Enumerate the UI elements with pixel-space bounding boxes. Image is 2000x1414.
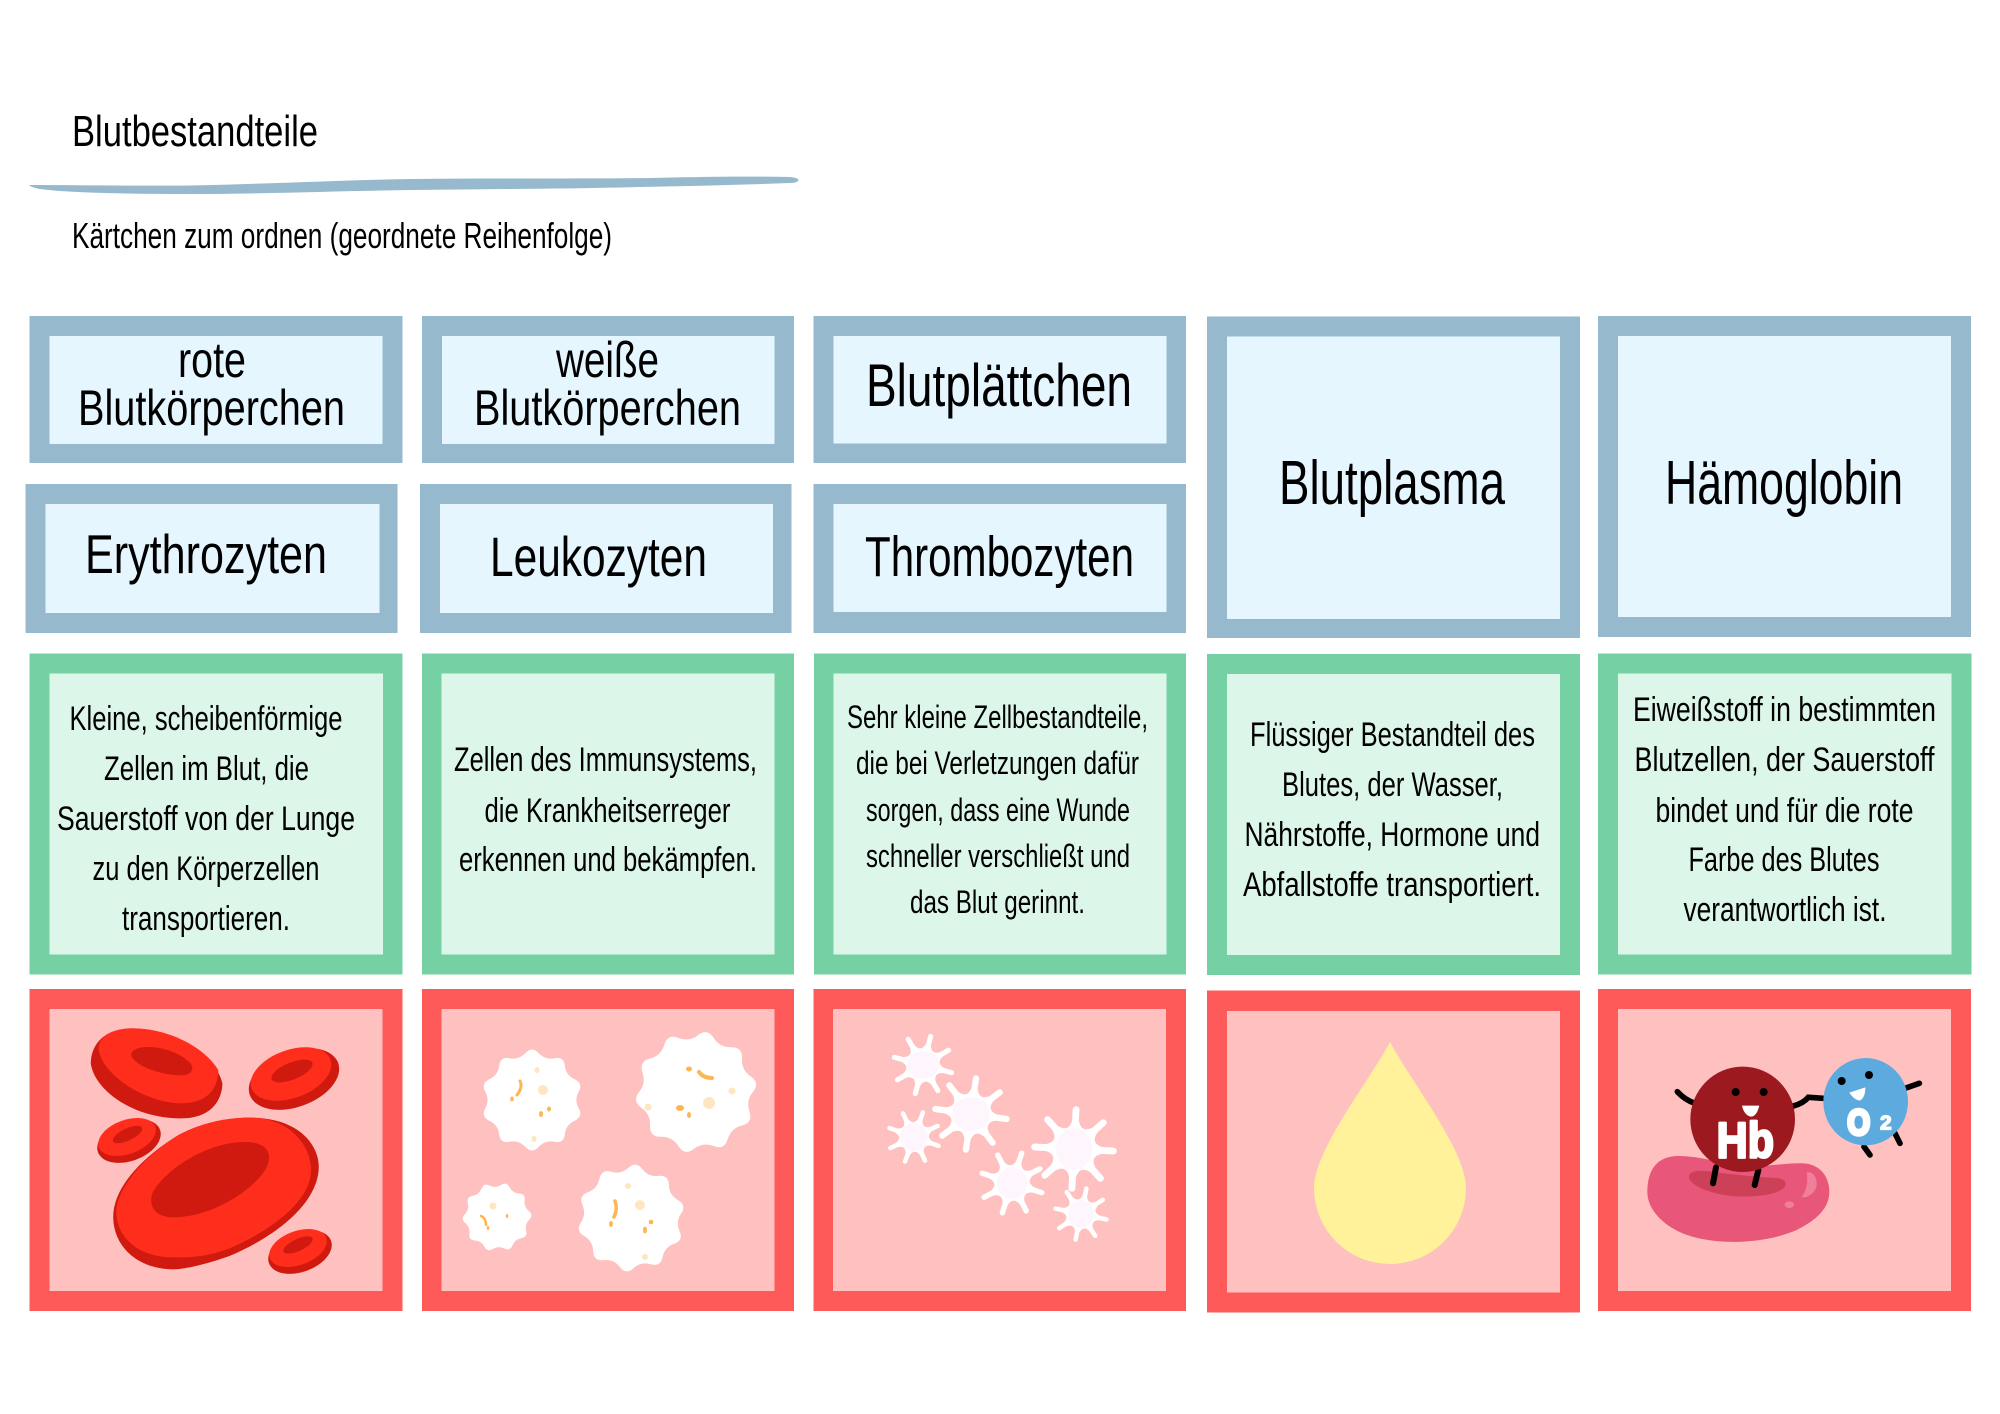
- title underline brush stroke: [29, 177, 798, 194]
- definition card: Thrombozyten: das Blut gerinnt.: [910, 884, 1085, 920]
- definition card: Blutplasma: Blutes, der Wasser,: [1282, 766, 1503, 804]
- icon: platelet 2: [930, 1073, 1012, 1155]
- definition card: Thrombozyten: Sehr kleine Zellbestandteile,: [847, 699, 1148, 735]
- definition card: Erythrozyten: Kleine, scheibenförmige: [70, 700, 342, 738]
- definition card: Thrombozyten: sorgen, dass eine Wunde: [866, 792, 1130, 828]
- icon: top-left red blood cell: [91, 1028, 222, 1118]
- card: rote Blutkörperchen: [30, 316, 402, 463]
- card: weiße Blutkörperchen: weiße: [555, 332, 659, 388]
- definition card: Thrombozyten: schneller verschließt und: [866, 838, 1130, 874]
- card: Thrombozyten: Thrombozyten: [865, 525, 1134, 589]
- picture card: white blood cells: [422, 989, 794, 1311]
- subtitle: Kärtchen zum ordnen (geordnete Reihenfolge): [72, 215, 612, 256]
- definition card: Hämoglobin: [1598, 654, 1972, 974]
- card: Erythrozyten: [26, 484, 398, 633]
- icon: white blood cell top-right: [628, 1022, 764, 1162]
- definition card: Thrombozyten: [814, 654, 1186, 974]
- icon: platelet 3: [881, 1104, 947, 1170]
- definition card: Blutplasma: Nährstoffe, Hormone und: [1244, 816, 1540, 854]
- picture card: hemoglobin: [1598, 989, 1971, 1311]
- icon: white blood cell bottom-right: [575, 1160, 687, 1276]
- card: Erythrozyten: Erythrozyten: [85, 523, 327, 585]
- definition card: Leukozyten: erkennen und bekämpfen.: [459, 841, 757, 879]
- card: Blutplättchen: Blutplättchen: [866, 352, 1132, 419]
- icon: bottom-right small red blood cell: [262, 1222, 338, 1282]
- icon: platelet 1: [887, 1029, 959, 1101]
- icon: yellow plasma drop: [1314, 1042, 1466, 1264]
- icon: hemoglobin and oxygen characters: [1647, 1058, 1919, 1242]
- card: rote Blutkörperchen: rote: [178, 332, 246, 388]
- card: Leukozyten: Leukozyten: [490, 525, 707, 588]
- card: Blutplasma: [1207, 316, 1580, 638]
- definition card: Hämoglobin: Farbe des Blutes: [1688, 841, 1880, 879]
- title: Blutbestandteile: [72, 107, 318, 156]
- icon: platelet 4: [1033, 1108, 1115, 1190]
- card: rote Blutkörperchen: Blutkörperchen: [78, 380, 345, 436]
- definition card: Thrombozyten: die bei Verletzungen dafür: [856, 745, 1139, 781]
- definition card: Erythrozyten: transportieren.: [122, 900, 290, 938]
- definition card: Erythrozyten: [30, 654, 402, 974]
- picture card: plasma drop: [1207, 990, 1580, 1312]
- card: Hämoglobin: [1598, 316, 1971, 637]
- picture card: red blood cells: [30, 989, 402, 1311]
- icon: hemoglobin and oxygen characters: Hb: [1717, 1112, 1774, 1168]
- icon: large red blood cell: [113, 1118, 319, 1269]
- picture card: platelets: [814, 989, 1186, 1311]
- icon: platelet 5: [973, 1144, 1051, 1222]
- icon: platelet 6: [1050, 1183, 1112, 1245]
- icon: white blood cell top-left: [484, 1049, 580, 1151]
- icon: top-right red blood cell: [240, 1037, 348, 1121]
- icon: left small red blood cell: [91, 1111, 167, 1171]
- card: weiße Blutkörperchen: [422, 316, 794, 463]
- card: Hämoglobin: Hämoglobin: [1665, 449, 1903, 518]
- card: weiße Blutkörperchen: Blutkörperchen: [474, 380, 741, 436]
- definition card: Erythrozyten: zu den Körperzellen: [92, 850, 320, 888]
- definition card: Blutplasma: Abfallstoffe transportiert.: [1243, 866, 1541, 904]
- card: Leukozyten: [420, 484, 792, 633]
- card: Blutplasma: Blutplasma: [1279, 449, 1505, 518]
- definition card: Leukozyten: [422, 654, 794, 974]
- definition card: Leukozyten: die Krankheitserreger: [484, 792, 730, 830]
- definition card: Erythrozyten: Zellen im Blut, die: [104, 750, 309, 788]
- definition card: Blutplasma: Flüssiger Bestandteil des: [1250, 716, 1535, 754]
- icon: white blood cell bottom-left: [456, 1175, 538, 1259]
- icon: hemoglobin and oxygen characters: 2: [1880, 1112, 1892, 1134]
- icon: hemoglobin and oxygen characters: O: [1847, 1103, 1870, 1142]
- definition card: Leukozyten: Zellen des Immunsystems,: [454, 741, 757, 779]
- definition card: Hämoglobin: bindet und für die rote: [1656, 792, 1914, 830]
- card: Thrombozyten: [814, 484, 1186, 633]
- definition card: Hämoglobin: verantwortlich ist.: [1684, 891, 1886, 929]
- card: Blutplättchen: [814, 316, 1186, 463]
- definition card: Erythrozyten: Sauerstoff von der Lunge: [57, 800, 355, 838]
- definition card: Blutplasma: [1207, 654, 1580, 975]
